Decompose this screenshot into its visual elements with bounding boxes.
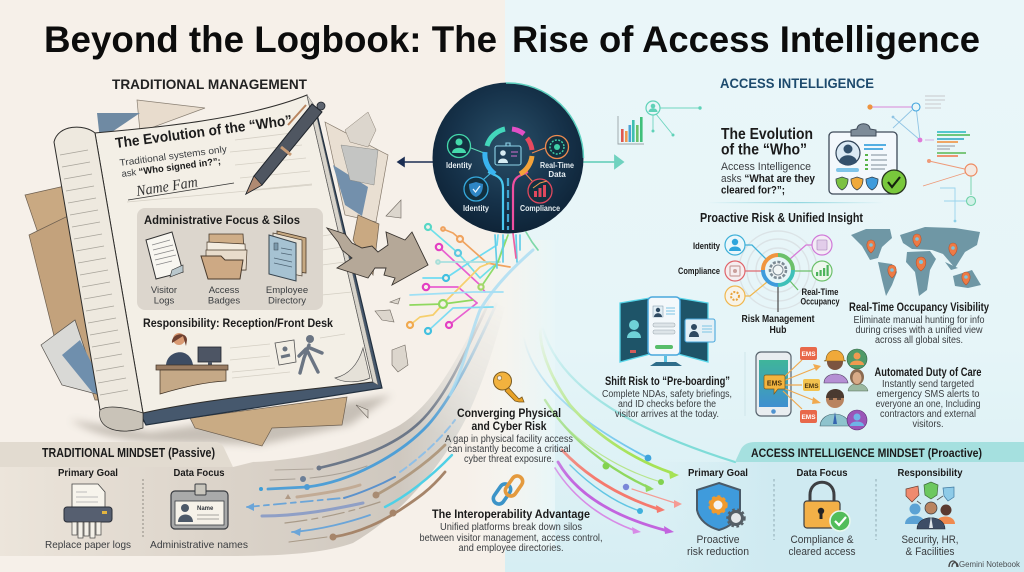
icon: torn paper arrow bbox=[327, 228, 428, 285]
heading: traditional management: TRADITIONAL MANAGEMENT bbox=[112, 76, 307, 92]
text: administrative names: Administrative names bbox=[150, 539, 248, 551]
text: converging risk: A gap in physical facility access bbox=[445, 434, 573, 445]
background blend in the centre bbox=[465, 240, 555, 550]
label: real-time occupancy: Real-Time bbox=[802, 287, 839, 297]
icon: shield and gear bbox=[697, 483, 745, 530]
subheading: Administrative Focus & Silos bbox=[144, 213, 300, 227]
traditional mindset band bbox=[0, 342, 488, 556]
header tab bbox=[735, 442, 1024, 462]
text: contractors and external bbox=[880, 409, 976, 420]
access intelligence mindset background bbox=[660, 462, 1024, 572]
book shadow bbox=[70, 395, 392, 445]
connectors bbox=[745, 245, 812, 312]
right flow nodes and arrowheads bbox=[602, 455, 682, 534]
heading: interoperability: The Interoperability Advantage bbox=[432, 507, 590, 521]
text: compliance and cleared access: Compliance & bbox=[790, 534, 854, 546]
map pins bbox=[867, 234, 970, 285]
icon: clearance clipboard bbox=[829, 124, 906, 194]
label: identity: Identity bbox=[446, 161, 472, 170]
text: across all global sites. bbox=[875, 335, 963, 346]
person: purple circle bbox=[847, 410, 867, 430]
text: interoperability: Unified platforms break down silos bbox=[440, 522, 582, 533]
icon: name badge: Name bbox=[197, 506, 214, 512]
left flow nodes and arrowheads bbox=[246, 466, 396, 540]
icon: pre-boarding devices bbox=[620, 297, 715, 366]
text: and ID checks before the bbox=[618, 399, 716, 410]
panel: converging risk: and Cyber Risk bbox=[472, 419, 547, 433]
text: emergency SMS alerts to bbox=[876, 389, 980, 400]
subheading: responsibility: Responsibility bbox=[898, 467, 963, 479]
panel: interoperability: between visitor management, access control, bbox=[420, 533, 602, 544]
text: real-time occupancy visibility: Eliminate manual hunting for info bbox=[854, 315, 985, 326]
node: process bbox=[725, 286, 745, 306]
left arrow bbox=[398, 158, 433, 166]
label: compliance: Compliance bbox=[520, 204, 560, 213]
heading: duty of care: Automated Duty of Care bbox=[874, 367, 982, 379]
text: asks “What are they bbox=[721, 173, 816, 185]
loose papers behind the book bbox=[25, 100, 388, 446]
node: occupancy bbox=[812, 261, 832, 281]
book cover bbox=[136, 110, 382, 425]
text: visitors. bbox=[912, 419, 944, 430]
paper fragments bbox=[356, 200, 408, 418]
band heading: TRADITIONAL MINDSET (Passive) bbox=[42, 446, 215, 460]
icon: phone and EMS alerts bbox=[756, 347, 868, 430]
right flowing data lines with arrows bbox=[525, 334, 736, 532]
label: identity 2: Identity bbox=[463, 204, 489, 213]
page curl lines bbox=[60, 150, 128, 395]
node: building bbox=[812, 235, 832, 255]
panel: converging risk bbox=[445, 372, 573, 465]
page rule lines bbox=[127, 132, 352, 378]
band background bbox=[0, 342, 488, 556]
panel heading: ACCESS INTELLIGENCE MINDSET (Proactive) bbox=[751, 446, 982, 460]
hub lines bbox=[471, 148, 545, 230]
background: intelligence side bbox=[505, 0, 1024, 572]
background: traditional side bbox=[0, 0, 506, 572]
label: identity: Identity bbox=[693, 241, 720, 251]
icon: world map with pins bbox=[851, 227, 981, 296]
panel: interoperability bbox=[420, 474, 602, 554]
book right page bbox=[95, 95, 373, 413]
access intelligence mindset panel: & Facilities bbox=[906, 546, 955, 558]
icon: visitor logs bbox=[146, 232, 183, 279]
label: access badges: Access bbox=[209, 285, 240, 296]
node: identity bbox=[725, 235, 745, 255]
subheading: data focus: Data Focus bbox=[174, 467, 225, 479]
panel: administrative focus: Badges bbox=[208, 296, 240, 306]
text: pre-boarding: Complete NDAs, safety briefings, bbox=[602, 389, 732, 400]
hub ring bbox=[763, 255, 793, 285]
panel: administrative focus: Logs bbox=[154, 296, 175, 306]
panel: central hub orb bbox=[432, 82, 584, 234]
icon: phone and EMS alerts: EMS bbox=[804, 383, 819, 390]
page curl corner bbox=[335, 348, 370, 382]
text: during crises with a unified view bbox=[856, 325, 983, 336]
page text emphasis: ask “Who signed in?”; bbox=[121, 156, 222, 180]
icon: key bbox=[494, 372, 524, 402]
divider bbox=[708, 202, 883, 203]
heading: proactive risk: Proactive Risk & Unified Insight bbox=[700, 211, 864, 225]
icon: small bar chart with node bbox=[618, 101, 702, 144]
heading: converging risk: Converging Physical bbox=[457, 406, 561, 420]
subheading: primary goal: Primary Goal bbox=[688, 467, 748, 479]
node: compliance bbox=[725, 261, 745, 281]
alert arrows bbox=[783, 360, 818, 409]
book left curl bbox=[54, 127, 143, 426]
access intelligence mindset panel: risk reduction bbox=[687, 546, 749, 558]
text: visitor arrives at the today. bbox=[615, 409, 719, 420]
icon: badge and walking visitor bbox=[275, 335, 322, 373]
page text: Traditional systems only bbox=[119, 144, 228, 169]
icon: padlock and check bbox=[804, 482, 850, 531]
pen bbox=[246, 102, 325, 194]
text: duty of care: Instantly send targeted bbox=[882, 379, 974, 390]
panel: interoperability: and employee directories. bbox=[458, 543, 564, 554]
icon: shredder bbox=[64, 484, 112, 538]
label: employee directory: Employee bbox=[266, 285, 308, 296]
person: man with glasses bbox=[820, 389, 850, 426]
icon: name badge bbox=[171, 484, 228, 529]
subheading: data focus: Data Focus bbox=[796, 467, 848, 479]
heading: evolution of who: The Evolution bbox=[721, 126, 813, 143]
title bbox=[44, 19, 980, 60]
icon: phone and EMS alerts: EMS bbox=[801, 351, 816, 358]
responsibility heading: Responsibility: Reception/Front Desk bbox=[143, 318, 334, 330]
label: compliance: Compliance bbox=[678, 266, 720, 276]
icon: identity bbox=[448, 134, 470, 158]
icon: phone and EMS alerts: EMS bbox=[767, 380, 782, 388]
heading: real-time occupancy visibility: Real-Time Occupancy Visibility bbox=[849, 302, 989, 314]
curled spine bottom bbox=[100, 407, 143, 431]
hub gear bbox=[770, 262, 786, 278]
text: of the “Who” bbox=[721, 142, 807, 158]
access intelligence mindset panel bbox=[687, 442, 1024, 558]
icon: folder bbox=[201, 234, 247, 279]
text: everyone an one, Including bbox=[876, 399, 980, 410]
title: Rise of Access Intelligence bbox=[512, 19, 980, 60]
band header tab bbox=[0, 442, 233, 467]
icon: security team bbox=[905, 482, 955, 529]
icon: shield bbox=[464, 177, 488, 201]
left flowing data lines with arrows bbox=[246, 308, 495, 542]
panel: converging risk: can instantly become a critical bbox=[448, 444, 570, 455]
hub ring bbox=[485, 129, 532, 174]
person: woman bbox=[848, 369, 868, 391]
icon: directory bbox=[269, 231, 306, 281]
panel: central hub orb: Data bbox=[548, 170, 566, 179]
person: hard hat worker bbox=[824, 350, 848, 383]
icon: receptionist at desk bbox=[156, 333, 228, 394]
title: Beyond the Logbook: The bbox=[44, 19, 497, 60]
label: visitor logs: Visitor bbox=[151, 285, 177, 296]
hub id card bbox=[495, 143, 521, 165]
text: security hr facilities: Security, HR, bbox=[902, 534, 958, 546]
page edge bbox=[307, 95, 378, 385]
text: replace paper logs: Replace paper logs bbox=[45, 539, 131, 551]
person: orange circle bbox=[847, 349, 867, 369]
decorative network top right bbox=[867, 96, 977, 222]
watermark: gemini notebook: Gemini Notebook bbox=[959, 560, 1021, 569]
divider bbox=[744, 352, 746, 416]
heading: pre-boarding: Shift Risk to “Pre-boarding” bbox=[605, 374, 730, 388]
text: proactive risk reduction: Proactive bbox=[696, 534, 740, 546]
panel: risk management hub bbox=[678, 231, 840, 336]
network nodes bbox=[407, 224, 484, 334]
panel: risk management hub: Occupancy bbox=[800, 296, 840, 306]
panel: administrative focus: Directory bbox=[268, 296, 306, 306]
label: risk management hub: Risk Management bbox=[742, 313, 815, 325]
signature bbox=[128, 174, 234, 200]
label: real-time data: Real-Time bbox=[540, 161, 574, 170]
subheading: primary goal: Primary Goal bbox=[58, 467, 118, 479]
right arrow bbox=[583, 156, 623, 168]
panel: administrative focus bbox=[137, 208, 323, 310]
text: evolution of who: Access Intelligence bbox=[721, 161, 811, 173]
text: cleared for?”; bbox=[721, 184, 785, 196]
heading: access intelligence: ACCESS INTELLIGENCE bbox=[720, 75, 874, 91]
access intelligence mindset panel: cleared access bbox=[788, 546, 856, 558]
panel: risk management hub: Hub bbox=[770, 324, 786, 336]
page heading: The Evolution of the “Who” bbox=[114, 113, 293, 152]
network fan below hub bbox=[410, 227, 538, 395]
icon: phone and EMS alerts: EMS bbox=[801, 414, 816, 421]
icon: chain links bbox=[491, 474, 525, 506]
panel: converging risk: cyber threat exposure. bbox=[464, 454, 554, 465]
icon: compliance chart bbox=[528, 179, 552, 203]
signature: Name Fam bbox=[134, 174, 199, 200]
icon: real-time data bbox=[546, 136, 568, 158]
panel: logbook illustration bbox=[25, 95, 392, 446]
